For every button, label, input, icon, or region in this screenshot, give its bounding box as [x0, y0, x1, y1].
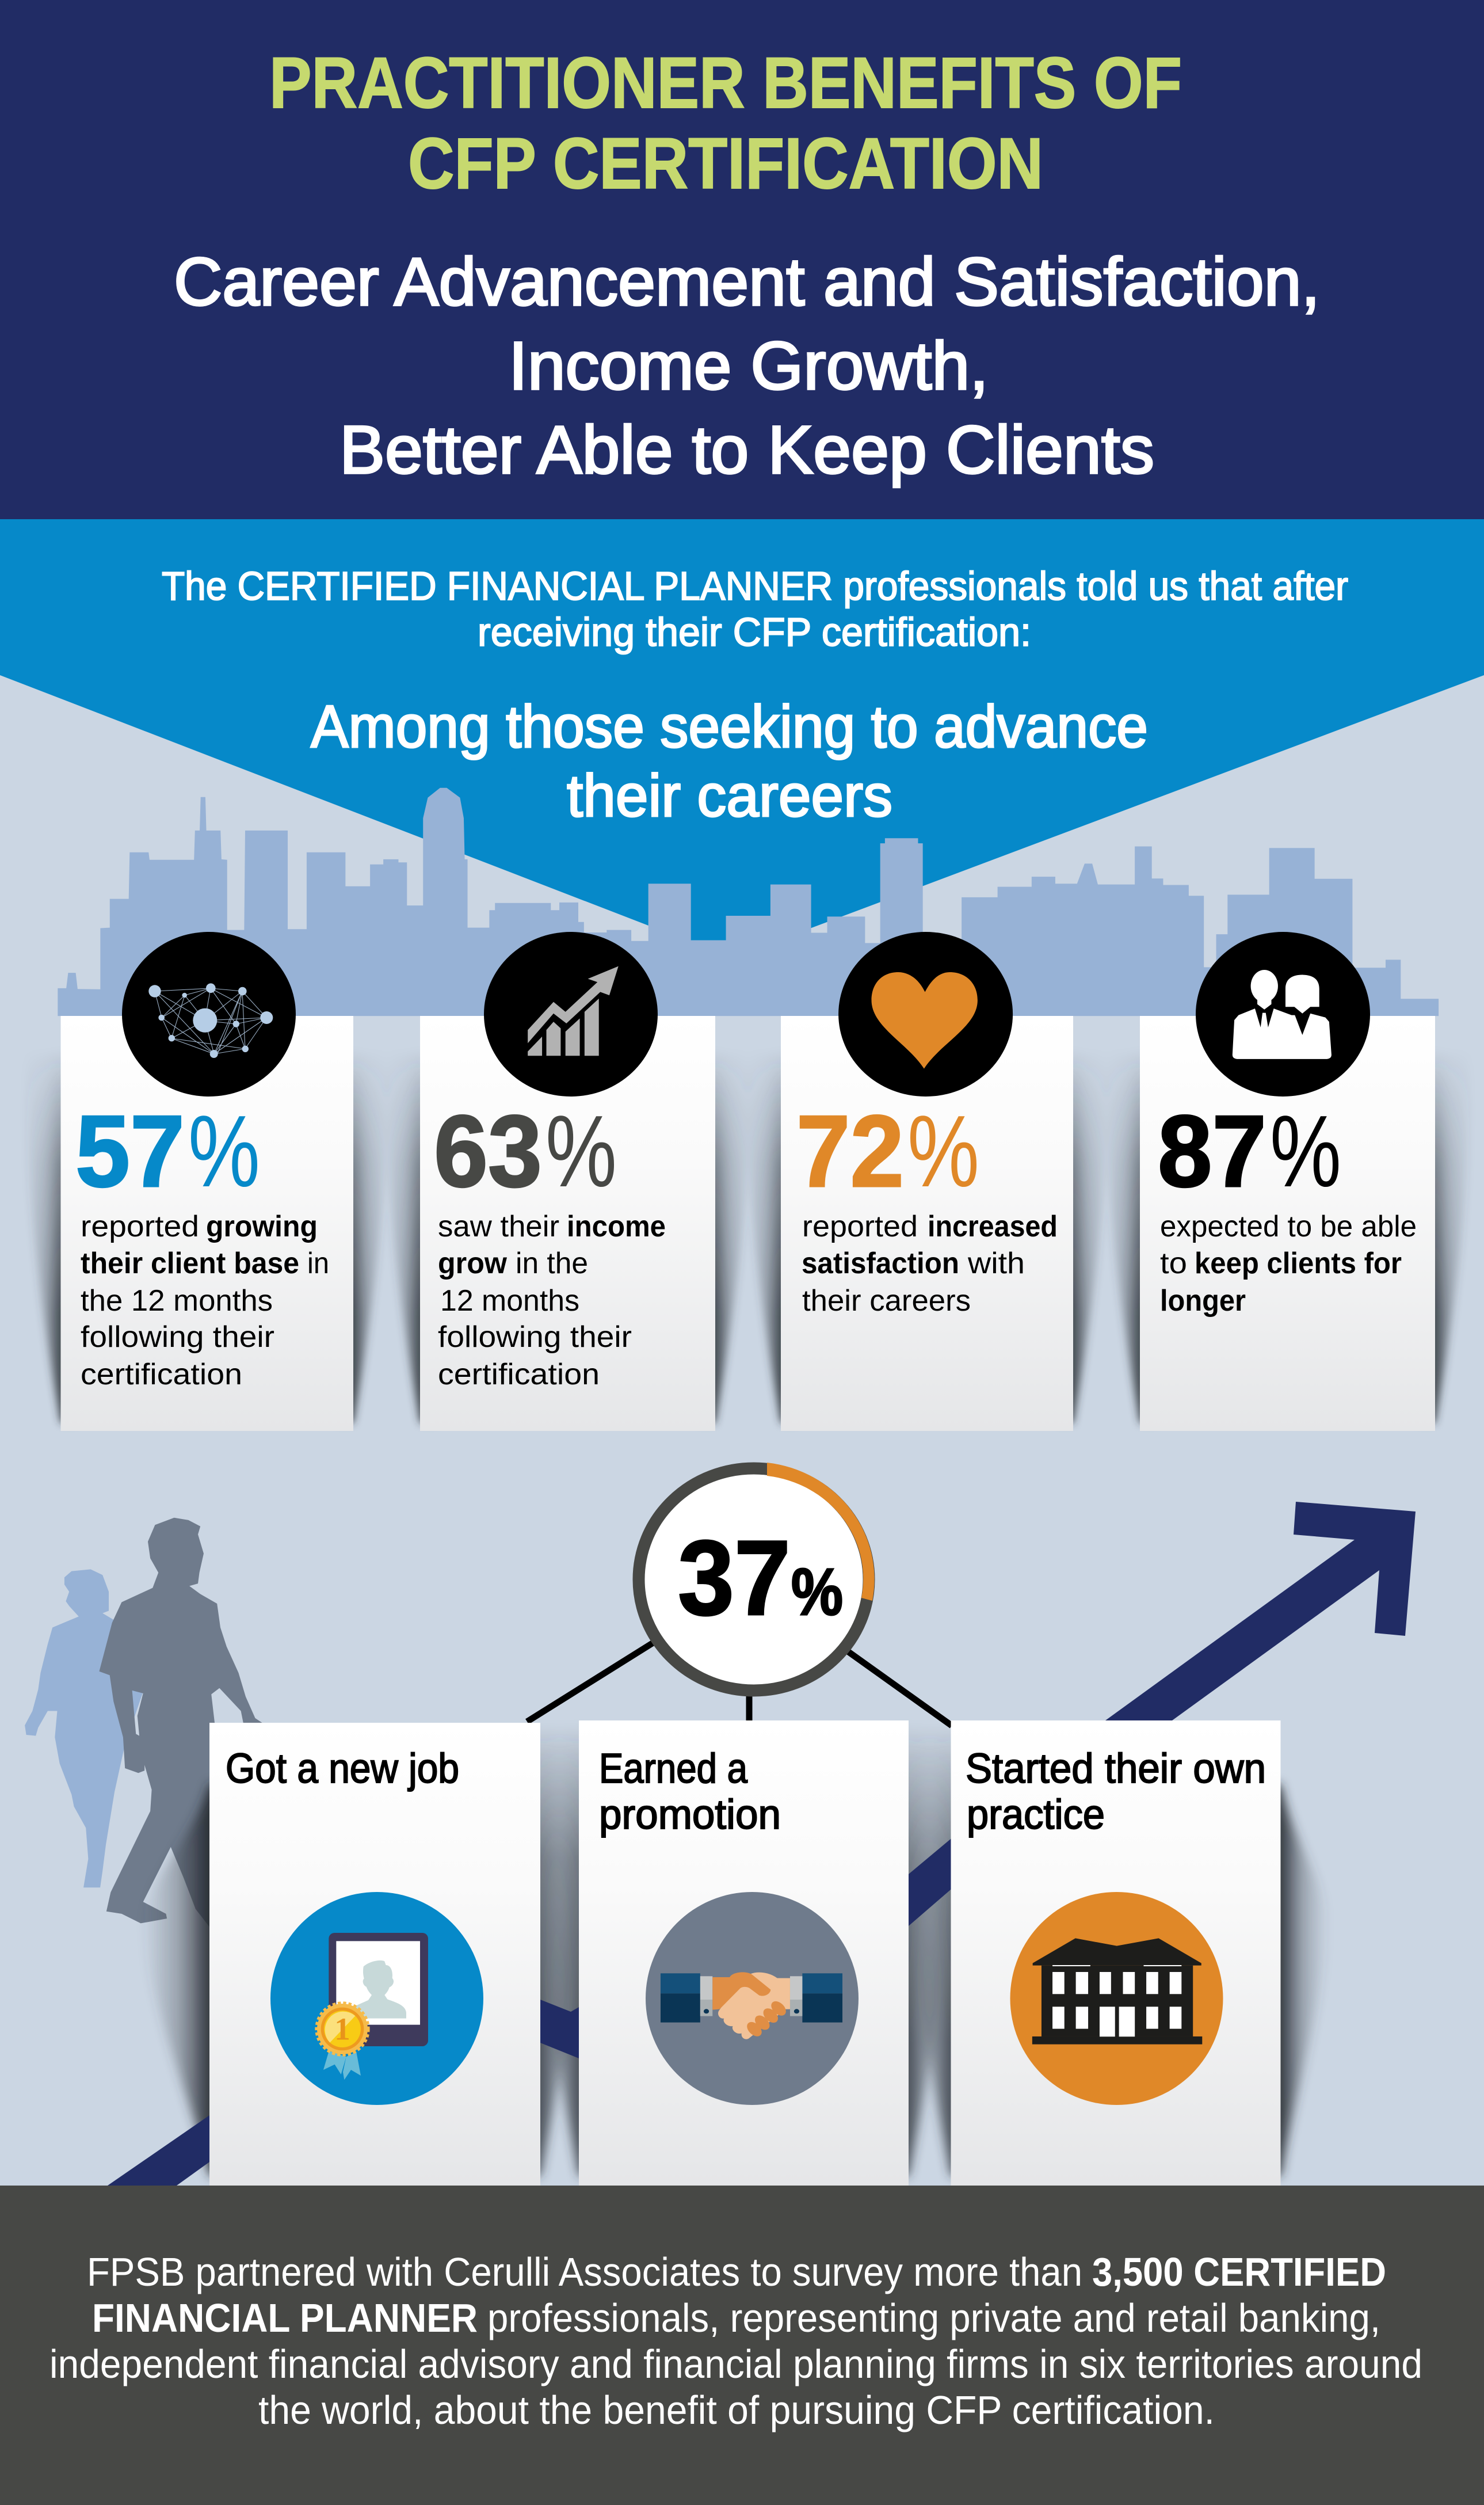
header panel [0, 0, 1484, 519]
footer text: professionals, representing private and retail banking, [487, 2295, 1380, 2340]
footer text: FPSB partnered with Cerulli Associates to survey more than [87, 2249, 1082, 2294]
text block: income [567, 1210, 666, 1243]
card title: Earned a [599, 1746, 748, 1792]
icon: heart [838, 932, 1013, 1097]
text block: 12 months [440, 1284, 579, 1318]
text block: the 12 months [81, 1284, 273, 1318]
text block: satisfaction [802, 1247, 959, 1280]
card title [966, 1746, 1266, 1838]
orange progress arc [767, 1463, 875, 1601]
card shadows row one [25, 1049, 1471, 1423]
panel: 57 percent card [61, 932, 353, 1431]
silhouettes: walking couple [25, 1518, 262, 1931]
intro text: The CERTIFIED FINANCIAL PLANNER professionals told us that after [162, 564, 1348, 608]
stat: 57%: 57 [75, 1094, 185, 1208]
stat: 57% [75, 1094, 260, 1208]
stat: 37%: 37 [678, 1519, 791, 1638]
section heading: among those seeking to advance: their careers [567, 763, 892, 829]
text block: following their [438, 1320, 632, 1354]
man silhouette [99, 1518, 262, 1931]
text block: to [1160, 1247, 1187, 1280]
subtitle: Better Able to Keep Clients [339, 412, 1154, 488]
stat: 87% [1158, 1094, 1341, 1208]
intro text: receiving their CFP certification: [478, 610, 1031, 654]
stat: 57%: % [188, 1094, 260, 1208]
text block: growing [206, 1210, 318, 1243]
footer text: independent financial advisory and financial planning firms in six territories around [49, 2342, 1422, 2386]
card title: Got a new job [226, 1746, 459, 1792]
stat: 63%: % [545, 1094, 617, 1208]
stat: 37%: % [791, 1555, 843, 1629]
icon: handshake [646, 1892, 859, 2105]
subtitle: Career Advancement and Satisfaction, [174, 244, 1320, 320]
text block: saw their [438, 1210, 559, 1243]
stat: 72% [796, 1094, 979, 1208]
panel: footer [0, 2186, 1484, 2505]
panel: started their own practice [951, 1720, 1281, 2186]
subtitle [174, 244, 1320, 488]
woman silhouette [25, 1569, 143, 1887]
stat: 87%: % [1270, 1094, 1341, 1208]
text block [438, 1210, 666, 1391]
text block: reported [802, 1210, 918, 1243]
icon: certificate and medal: 1 [334, 2011, 350, 2046]
icon: office building [1010, 1892, 1223, 2105]
text block: increased [928, 1210, 1058, 1243]
text block: reported [81, 1210, 199, 1243]
title: CFP CERTIFICATION [408, 124, 1043, 204]
stat: 63% [434, 1094, 617, 1208]
text block: their client base [81, 1247, 299, 1280]
panel: 72 percent card [781, 932, 1073, 1431]
footer text: FINANCIAL PLANNER [92, 2295, 478, 2340]
stat: 72%: 72 [796, 1094, 904, 1208]
text block: in [307, 1247, 329, 1280]
intro text [162, 564, 1348, 654]
text block: longer [1160, 1284, 1246, 1318]
section heading: among those seeking to advance [311, 694, 1148, 829]
card title: practice [967, 1792, 1105, 1838]
text block: grow [438, 1247, 508, 1280]
text block: expected to be able [1160, 1210, 1417, 1243]
title: PRACTITIONER BENEFITS OF [269, 43, 1182, 123]
arrow: rising career path [108, 1502, 1416, 2186]
stat: 72%: % [907, 1094, 979, 1208]
text block: keep clients for [1195, 1247, 1402, 1280]
icon: certificate and medal [270, 1892, 483, 2105]
card title: promotion [599, 1792, 781, 1838]
icon: rising chart [484, 932, 658, 1097]
card shadows row two [143, 1724, 1327, 2176]
panel: 87 percent card [1140, 932, 1435, 1431]
stat: 63%: 63 [434, 1094, 542, 1208]
card title [599, 1746, 781, 1838]
footer text: the world, about the benefit of pursuing CFP certification. [258, 2388, 1215, 2432]
stat ring: 37 percent [639, 1463, 875, 1691]
blue banner with V shape [0, 519, 1484, 958]
footer text: 3,500 CERTIFIED [1092, 2249, 1386, 2294]
icon: network [122, 932, 296, 1097]
text block [81, 1210, 329, 1391]
city skyline [58, 788, 1439, 1016]
text block: their careers [802, 1284, 971, 1318]
section heading: among those seeking to advance: Among those seeking to advance [311, 694, 1148, 760]
title [269, 43, 1182, 204]
text block: certification [81, 1358, 242, 1391]
text block: certification [438, 1358, 600, 1391]
stat: 87%: 87 [1158, 1094, 1266, 1208]
text block [802, 1210, 1058, 1318]
text block: following their [81, 1320, 274, 1354]
footer text [49, 2249, 1422, 2432]
text block [1160, 1210, 1417, 1318]
subtitle: Income Growth, [509, 328, 989, 404]
connector lines [527, 1643, 952, 1726]
icon: two professionals [1196, 932, 1370, 1097]
text block: with [967, 1247, 1025, 1280]
card title: Started their own [966, 1746, 1266, 1792]
panel: earned a promotion [579, 1720, 909, 2186]
panel: got a new job [209, 1723, 540, 2186]
text block: in the [516, 1247, 588, 1280]
panel: 63 percent card [420, 932, 715, 1431]
